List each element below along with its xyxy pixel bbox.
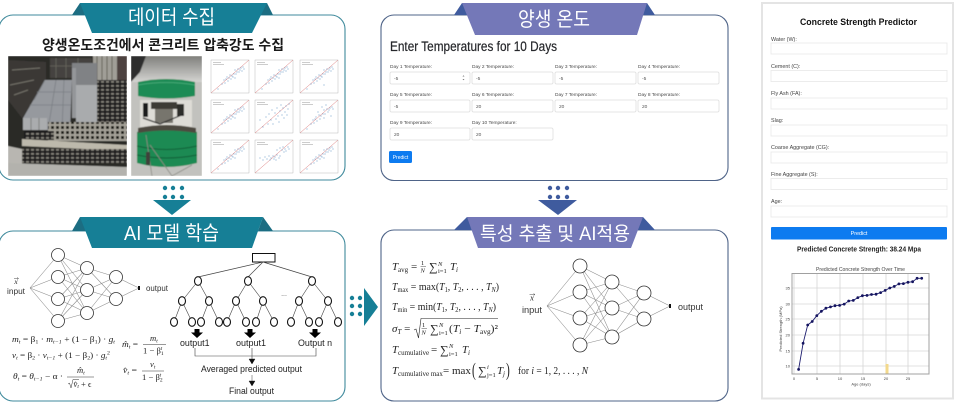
formulas: temperature features: T [436,301,443,313]
banner: data collection: 데이터 수집 [128,6,215,29]
formulas: Adam optimizer: ) · [98,334,109,344]
formulas: Adam optimizer: v̂ [123,365,128,375]
formulas: temperature features: i [487,364,489,371]
formulas: Adam optimizer: t [127,370,130,376]
formulas: temperature features: σ [392,323,398,335]
arrow: temperature to feature extraction [538,186,577,215]
formulas: temperature features: , . . . , [461,281,486,293]
formulas: Adam optimizer: t [129,344,131,350]
form: mix inputs [771,37,947,217]
neural network diagram: application: output [678,302,703,312]
formulas: Adam optimizer: m [12,334,19,344]
banner: data collection [72,3,273,33]
diagram: random forest ensemble: output1 [236,338,266,348]
formulas: temperature features: N [488,306,493,314]
form: ten day temperature inputs: Day 2 Temperature: [472,64,514,70]
form: ten day temperature inputs: -5 [394,76,399,82]
formulas: temperature features: ∑ [429,260,438,274]
formulas: Adam optimizer: 1 [35,340,39,346]
formulas: temperature features: 1 [421,260,424,267]
subtitle: data collection: 양생온도조건에서 콘크리트 압축강도 수집 [42,37,284,53]
formulas: temperature features: T [474,323,481,335]
formulas: temperature features: cumulative max [398,370,443,378]
formulas: temperature features: , [448,281,453,293]
diagram: random forest ensemble: output1 [180,338,210,348]
photo: curing chamber with specimens [8,56,127,176]
formulas: temperature features: (T [449,323,459,335]
form: ten day temperature inputs: Day 6 Temperature: [472,92,514,98]
chart grid: predicted versus measured scatter plots [211,60,338,173]
line chart: predicted strength over time: 25 [786,316,791,322]
formulas: temperature features: j [502,370,505,378]
formulas: temperature features: T [497,365,504,377]
formulas: temperature features: 2 [458,286,462,294]
formulas: Adam optimizer: t [19,340,21,346]
neural network diagram: training: input [7,286,26,296]
form: mix inputs: Coarse Aggregate (CG): [771,145,829,151]
formulas: temperature features: ) [493,301,496,313]
formulas: Adam optimizer [12,333,166,390]
formulas: temperature features: ∑ [430,322,439,336]
panel: AI model training [0,217,345,401]
scatter plot 2 [255,60,293,93]
formulas: Adam optimizer: t [83,370,85,376]
banner: curing temperature: 양생 온도 [518,8,590,31]
scatter plot 5 [255,100,293,133]
formulas: Adam optimizer: g [101,350,106,360]
formulas: temperature features: i [456,266,458,274]
panel: data collection [0,3,345,180]
formulas: temperature features: i=1 [449,351,458,358]
line chart: predicted strength over time: 5 [816,376,819,381]
formulas: Adam optimizer: = [19,371,29,381]
scatter plot 1 [211,60,249,93]
formulas: Adam optimizer: t [77,384,79,390]
banner: AI model training [72,217,273,248]
formulas: Adam optimizer: 2 [87,356,90,362]
formulas: Adam optimizer: v [150,359,154,369]
neural network diagram: application: input [522,305,542,315]
form: ten day temperature inputs: Day 3 Temperature: [555,64,597,70]
formulas: Adam optimizer: g [109,334,114,344]
diagram: random forest ensemble [170,254,342,396]
formulas: temperature features: avg [398,266,409,274]
form: ten day temperature inputs: Day 9 Temperature: [390,120,432,126]
line chart: predicted strength over time: 10 [786,364,791,368]
formulas: Adam optimizer: t [156,338,158,344]
banner: feature extraction: 특성 추출 및 AI적용 [480,223,630,245]
scatter plot 7 [211,140,249,173]
formulas: Adam optimizer: t [16,356,18,362]
formulas: temperature features [392,260,589,381]
line chart: predicted strength over time: 15 [861,376,866,381]
formulas: temperature features: N [420,268,426,274]
form: ten day temperature inputs: Day 10 Temperature: [472,120,517,126]
line chart: predicted strength over time: 15 [786,348,791,354]
panel: feature extraction and AI application [381,217,728,401]
formulas: temperature features: ( [472,360,476,381]
form: ten day temperature inputs [390,64,719,140]
scatter plot 3 [300,60,338,93]
line chart: predicted strength over time: 10 [838,376,843,381]
formulas: Adam optimizer: t [113,340,116,346]
formulas: Adam optimizer: t [18,376,20,382]
formulas: Adam optimizer: 2 [107,350,110,356]
formulas: temperature features: )² [491,323,499,335]
formulas: Adam optimizer: θ [13,371,18,381]
formulas: temperature features: , . . . , [458,301,483,313]
heading: predictor title: Concrete Strength Predictor [800,16,917,27]
form: mix inputs: Water (W): [771,37,797,43]
formulas: temperature features: T [483,301,489,313]
formulas: temperature features: N [448,343,454,350]
formulas: Adam optimizer: ) · [90,350,101,360]
formulas: temperature features: j=1 [486,372,496,379]
form: ten day temperature inputs: 20 [476,132,482,138]
formulas: Adam optimizer: + (1 − β [55,350,87,360]
formulas: temperature features: N [491,286,496,294]
neural network diagram: training: x [13,277,18,286]
photo: strain test rig with green mould [131,56,202,176]
formulas: temperature features: , [445,301,450,313]
formulas: Adam optimizer: · [35,350,43,360]
formulas: Adam optimizer: t−1 [47,356,56,362]
formulas: temperature features: min [397,306,408,314]
line chart: predicted strength over time: 35 [786,286,791,290]
form: mix inputs: Fine Aggregate (S): [771,172,818,178]
formulas: temperature features: i=1 [439,330,448,337]
scatter plot 6 [300,100,338,133]
formulas: temperature features: ) [496,281,499,293]
form: mix inputs: Cement (C): [771,64,800,70]
formulas: Adam optimizer: t−1 [34,376,43,382]
scatter plot 9 [300,140,338,173]
diagram: random forest ensemble: ... [281,291,287,298]
formulas: Adam optimizer: − α · [43,371,63,381]
form: ten day temperature inputs: Day 8 Temperature: [638,92,680,98]
formulas: Adam optimizer: = β [18,350,32,360]
formulas: temperature features: i [468,349,470,357]
scatter plot 8 [255,140,293,173]
formulas: temperature features: 1 [422,322,425,329]
form: ten day temperature inputs: Day 7 Temperature: [555,92,597,98]
formulas: Adam optimizer: = β [21,334,35,344]
formulas: Adam optimizer: t−1 [53,340,62,346]
formulas: Adam optimizer: 1 [161,351,164,357]
formulas: temperature features: = max( [408,281,439,293]
formulas: Adam optimizer: + (1 − β [62,334,95,344]
formulas: temperature features: T [450,301,456,313]
formulas: temperature features: 1 [445,286,448,294]
formulas: temperature features: T [453,281,459,293]
formulas: temperature features: for i = 1, 2, . . . , N [518,365,589,377]
line chart: predicted strength over time: 30 [786,302,791,306]
neural network diagram: application: x [529,292,534,302]
formulas: temperature features: ∑ [440,343,449,357]
formulas: Adam optimizer: t [160,372,162,378]
neural network diagram: application [522,259,703,352]
line chart: predicted strength over time: Predicted Concrete Strength Over Time [816,267,905,273]
arrow: data collection to model training [153,186,191,215]
formulas: temperature features: T [397,328,402,336]
formulas: temperature features: = [401,323,410,335]
formulas: Adam optimizer: = [130,339,138,349]
formulas: temperature features: = min( [407,301,437,313]
formulas: Adam optimizer: t [161,346,163,352]
diagram: random forest ensemble: Averaged predicted output [201,364,303,374]
formulas: temperature features: T [392,344,399,356]
line chart: predicted strength over time: Age (days) [851,382,871,386]
formulas: temperature features: avg [480,328,491,336]
diagram: random forest ensemble: Final output [229,386,275,396]
form: ten day temperature inputs: 20 [642,104,648,110]
formulas: Adam optimizer: v [12,350,16,360]
formulas: temperature features: T [392,365,399,377]
formulas: Adam optimizer: v̂ [73,379,78,389]
formulas: temperature features: max [397,286,409,294]
form: ten day temperature inputs: Day 5 Temperature: [390,92,432,98]
formulas: Adam optimizer: · [38,334,46,344]
form: mix inputs: Slag: [771,118,783,124]
formulas: temperature features: T [392,261,399,273]
formulas: temperature features: cumulative [398,349,429,357]
formulas: Adam optimizer: t [154,364,156,370]
formulas: temperature features: T [486,281,492,293]
form: ten day temperature inputs: 20 [476,104,482,110]
formulas: temperature features: 1 [442,306,445,314]
line chart: predicted strength over time: Predicted Strength (MPa) [778,306,783,352]
button: predict [389,151,412,163]
formulas: Adam optimizer: v [43,350,47,360]
form: ten day temperature inputs: Day 4 Temperature: [638,64,680,70]
arrow: model training to feature extraction [350,288,378,326]
diagram: random forest ensemble: Output n [298,338,332,348]
line chart: predicted strength over time: 20 [786,332,791,338]
formulas: temperature features: − [461,323,474,335]
formulas: Adam optimizer: = [129,365,137,375]
formulas: temperature features: ) [506,360,510,381]
formulas: Adam optimizer: t [105,356,108,362]
banner: curing temperature [454,3,655,35]
form: mix inputs: Fly Ash (FA): [771,91,802,97]
formulas: Adam optimizer: m [150,333,156,343]
formulas: Adam optimizer: 2 [160,378,163,384]
formulas: temperature features: N [438,322,444,329]
formulas: temperature features: ∑ [478,364,487,378]
formulas: Adam optimizer: 1 − β [143,346,161,356]
formulas: temperature features: 2 [455,306,459,314]
scatter plot 4 [211,100,249,133]
form: mix inputs: Age: [771,199,782,205]
formulas: temperature features: N [437,261,443,268]
formulas: Adam optimizer: 1 [95,340,98,346]
button: predict [771,227,947,240]
line chart: predicted strength over time: 0 [793,376,796,381]
heading: temperature form: Enter Temperatures for 10 Days [390,39,557,54]
line chart: predicted strength over time [778,267,929,386]
formulas: Adam optimizer: θ [29,371,35,381]
line chart: predicted strength over time: 20 [884,376,889,381]
formulas: Adam optimizer: m̂ [122,339,129,349]
formulas: temperature features: = [411,261,417,273]
formulas: temperature features: = max [443,365,471,377]
formulas: temperature features: N [420,330,426,336]
formulas: Adam optimizer: + ϵ [79,379,92,389]
button: predict: Predict [851,231,868,237]
formulas: Adam optimizer: m̂ [77,365,83,375]
panel: concrete strength predictor app [762,3,953,398]
formulas: temperature features: T [392,301,398,313]
neural network diagram: training [7,248,169,328]
formulas: temperature features: i [459,328,461,336]
form: ten day temperature inputs: 20 [559,104,565,110]
formulas: temperature features: i=1 [438,268,447,275]
form: ten day temperature inputs: -5 [476,76,481,82]
formulas: Adam optimizer: 2 [32,356,35,362]
result: predicted strength: Predicted Concrete Strength: 38.24 Mpa [797,246,921,254]
form: ten day temperature inputs: 20 [394,132,400,138]
formulas: Adam optimizer: m [46,334,53,344]
neural network diagram: training: output [146,284,169,293]
form: ten day temperature inputs: -5 [559,76,564,82]
formulas: temperature features: = [431,344,437,356]
formulas: temperature features: T [462,344,469,356]
form: ten day temperature inputs: -5 [394,104,399,110]
button: predict: Predict [393,155,409,161]
banner: feature extraction [454,217,655,248]
line chart: predicted strength over time: 25 [906,376,911,381]
formulas: temperature features: T [450,261,457,273]
formulas: temperature features: T [392,281,398,293]
form: ten day temperature inputs: Day 1 Temperature: [390,64,432,70]
formulas: temperature features: T [439,281,445,293]
formulas: Adam optimizer: 1 − β [142,372,160,382]
form: ten day temperature inputs: -5 [642,76,647,82]
banner: AI model training: AI 모델 학습 [124,222,219,245]
panel: curing temperature [381,3,728,180]
